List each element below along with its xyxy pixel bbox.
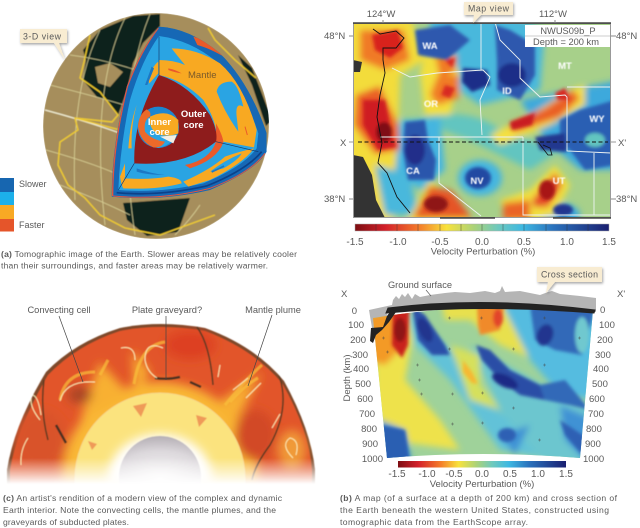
caption b: (b) A map (of a surface at a depth of 200 km) and cross section of xyxy=(340,493,618,503)
map axes: latitude and longitude: 124°W xyxy=(367,9,395,20)
half-globe artwork xyxy=(0,324,320,488)
depth axes: 200 xyxy=(597,335,613,346)
legend: velocity colours: Slower xyxy=(19,179,47,189)
map axes: latitude and longitude: 38°N xyxy=(324,194,345,205)
label: mantle: Mantle xyxy=(188,70,217,81)
callout: 3-D view xyxy=(20,29,67,60)
map labels: states: ID xyxy=(502,86,512,97)
crust band xyxy=(386,302,595,313)
depth axes: 100 xyxy=(599,320,615,331)
map labels: states: MT xyxy=(558,61,572,72)
label box: model and depth: Depth = 200 km xyxy=(533,37,599,47)
caption c: graveyards of subducted plates. xyxy=(3,517,129,527)
colour bar: section: -1.0 xyxy=(418,469,436,480)
depth axes: 800 xyxy=(586,424,602,435)
map labels: states: OR xyxy=(424,99,438,110)
depth axes: 0 xyxy=(600,305,605,316)
callout: map view: Map view xyxy=(468,4,510,14)
map labels: states: UT xyxy=(553,176,566,187)
caption b xyxy=(340,493,618,527)
colour bar: map: 0.5 xyxy=(517,237,531,248)
map labels: states: WY xyxy=(589,114,605,125)
caption c xyxy=(3,493,283,527)
colour bar: section: Velocity Perturbation (%) xyxy=(430,479,534,490)
map labels: states xyxy=(406,41,605,187)
labels: convecting cell, plate graveyard, mantle plume: Plate graveyard? xyxy=(132,305,202,315)
label: inner core: Inner xyxy=(148,117,171,128)
legend: velocity colours: Faster xyxy=(19,220,45,230)
depth axes: X' xyxy=(617,289,625,300)
ground surface profile xyxy=(369,286,596,328)
colour bar: map: -0.5 xyxy=(431,237,449,248)
labels: convecting cell, plate graveyard, mantle plume: Mantle plume xyxy=(245,305,301,315)
depth axes: 900 xyxy=(585,439,601,450)
callout: map view xyxy=(464,2,513,23)
panel a: 3-D globe xyxy=(0,13,297,270)
depth axes: 400 xyxy=(593,364,609,375)
depth axes: 500 xyxy=(355,379,371,390)
caption a: (a) Tomographic image of the Earth. Slower areas may be relatively cooler xyxy=(1,249,297,259)
depth axes: 300 xyxy=(595,350,611,361)
map axes: latitude and longitude: 48°N xyxy=(324,31,345,42)
callout: 3-D view: 3-D view xyxy=(23,32,62,42)
panel c: artist's Earth interior xyxy=(0,305,320,527)
depth axes: 1000 xyxy=(583,454,604,465)
depth axes: 800 xyxy=(361,424,377,435)
map axes: latitude and longitude: 112°W xyxy=(539,9,567,20)
depth axes: 600 xyxy=(357,394,373,405)
depth axes: Depth (km) xyxy=(342,355,353,401)
colour bar: section: 0.0 xyxy=(475,469,489,480)
label: core: core xyxy=(149,127,170,138)
caption b: tomographic data from the EarthScope array. xyxy=(340,517,528,527)
labels: convecting cell, plate graveyard, mantle plume: Convecting cell xyxy=(27,305,91,315)
depth axes: 700 xyxy=(359,409,375,420)
depth axes: 900 xyxy=(362,439,378,450)
section line X–X': X' xyxy=(618,138,626,149)
globe surface xyxy=(43,13,272,239)
section line X–X' xyxy=(340,138,626,149)
map labels: states: CA xyxy=(406,166,420,177)
colour bar: section xyxy=(388,461,573,490)
colour bar: map: 1.0 xyxy=(560,237,574,248)
label box: model and depth: NWUS09b_P xyxy=(540,26,596,36)
colour bar: map: -1.0 xyxy=(389,237,407,248)
colour bar: section: -1.5 xyxy=(388,469,406,480)
depth axes: 300 xyxy=(352,350,368,361)
caption a: than their surroundings, and faster areas may be relatively warmer. xyxy=(1,260,268,270)
callout: cross section: Cross section xyxy=(541,270,598,280)
panel: map view xyxy=(324,2,637,258)
depth axes: X xyxy=(341,289,348,300)
map labels: states: WA xyxy=(422,41,438,52)
grid crosses xyxy=(382,316,581,442)
colour bar: map: Velocity Perturbation (%) xyxy=(431,246,535,258)
legend: velocity colours xyxy=(0,178,47,232)
colour bar: map: 0.0 xyxy=(475,237,489,248)
frame xyxy=(354,24,610,218)
colour bar: section: 1.5 xyxy=(559,469,573,480)
depth axes: 400 xyxy=(353,364,369,375)
depth axes: 500 xyxy=(592,379,608,390)
colour bar: section: -0.5 xyxy=(445,469,463,480)
colour bar: section: 0.5 xyxy=(503,469,517,480)
label: ground surface xyxy=(388,280,452,296)
colour bar: map: 1.5 xyxy=(602,237,616,248)
caption b: the Earth beneath the western United States, constructed using xyxy=(340,505,609,515)
depth axes: 0 xyxy=(352,306,357,317)
depth axes xyxy=(341,289,625,465)
tomographic section xyxy=(373,309,593,458)
panel b: cross section xyxy=(340,267,625,527)
depth axes: 1000 xyxy=(362,454,383,465)
colour bar: map xyxy=(346,224,616,258)
map axes: latitude and longitude xyxy=(324,9,637,205)
label: outer core second line: core xyxy=(183,120,204,131)
depth axes: 100 xyxy=(348,320,364,331)
depth axes: 700 xyxy=(588,409,604,420)
map labels: states: NV xyxy=(470,176,484,187)
caption a xyxy=(1,249,297,270)
depth axes: 200 xyxy=(350,335,366,346)
colour bar: section: 1.0 xyxy=(531,469,545,480)
labels: convecting cell, plate graveyard, mantle plume xyxy=(27,305,301,315)
label box: model and depth xyxy=(525,25,610,47)
section line X–X': X xyxy=(340,138,347,149)
caption c: Earth interior. Note the convecting cells, the mantle plumes, and the xyxy=(3,505,276,515)
inner core xyxy=(138,107,179,148)
label: outer core: Outer xyxy=(181,109,206,120)
map axes: latitude and longitude: 38°N xyxy=(616,194,637,205)
colour bar: map: -1.5 xyxy=(346,237,364,248)
caption c: (c) An artist's rendition of a modern view of the complex and dynamic xyxy=(3,493,283,503)
callout lines xyxy=(59,315,272,386)
cut-away wedge xyxy=(112,26,267,198)
tomographic map xyxy=(354,24,610,217)
label: ground surface: Ground surface xyxy=(388,280,452,290)
depth axes: 600 xyxy=(589,394,605,405)
map axes: latitude and longitude: 48°N xyxy=(616,31,637,42)
callout: cross section xyxy=(537,267,602,293)
